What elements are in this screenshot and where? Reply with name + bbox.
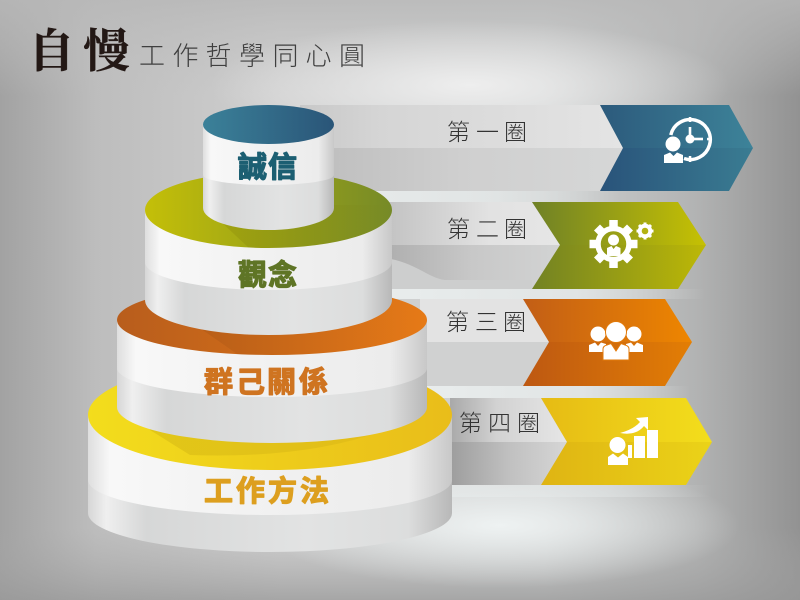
- label: concepts: 觀念: [238, 258, 297, 292]
- label: work methods: 工作方法: [204, 475, 329, 508]
- row 4: band and chevron: [450, 398, 712, 497]
- chevron: first circle: [600, 105, 753, 191]
- chevron: third circle: [523, 299, 692, 386]
- cylinder: fourth circle (bottom tier): [88, 385, 452, 552]
- chevron: second circle: [532, 202, 706, 289]
- chevron: fourth circle: [541, 398, 712, 485]
- row 3: band and chevron: [420, 299, 692, 398]
- cylinder: second circle: [145, 172, 392, 335]
- icon: group of people: [589, 322, 643, 360]
- cylinder: first circle (top tier): [203, 105, 334, 230]
- label: first circle: 第一圈: [447, 119, 527, 145]
- label: fourth circle: 第四圈: [459, 410, 540, 436]
- icon: person in gear: [590, 220, 654, 268]
- row 2: band and chevron: [385, 202, 706, 299]
- row 1: band and chevron: [300, 105, 753, 202]
- label: integrity: 誠信: [238, 151, 297, 184]
- label: third circle: 第三圈: [446, 309, 526, 335]
- title: subtitle: 工作哲學同心圓: [139, 41, 365, 71]
- icon: person with growth chart: [608, 417, 658, 465]
- label: relationships: 群己關係: [204, 366, 328, 399]
- title: main heading: 自慢: [28, 26, 130, 77]
- title: [28, 26, 365, 77]
- cylinder: third circle: [117, 285, 427, 443]
- icon: person with clock: [664, 117, 712, 163]
- label: second circle: 第二圈: [447, 216, 527, 242]
